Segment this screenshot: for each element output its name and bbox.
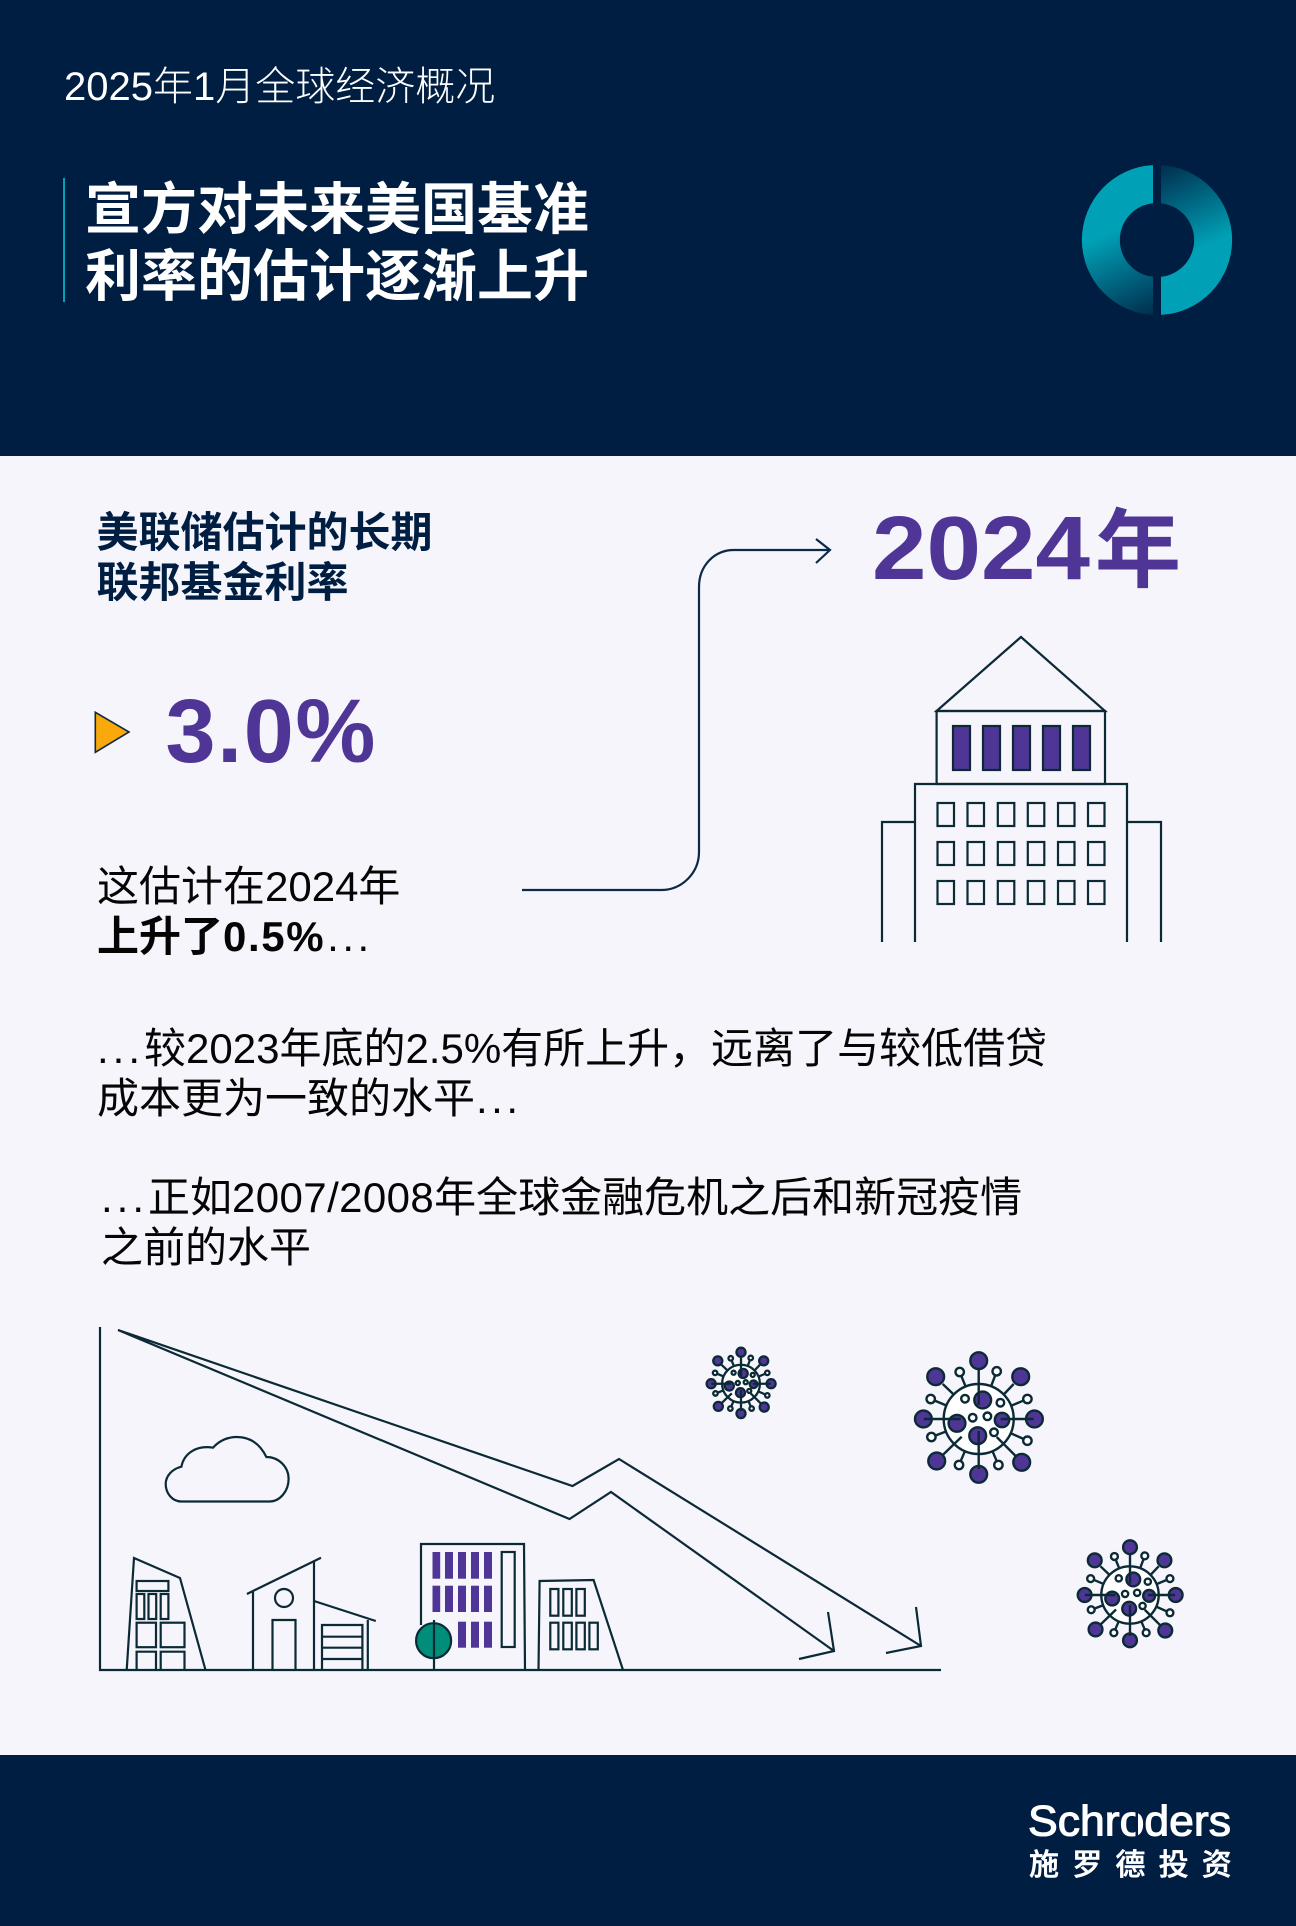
footer panel: [0, 1755, 1296, 1926]
icon: amber triangle marker: [95, 712, 129, 752]
text: estimate rose in 2024: 这估计在2024年: [97, 863, 400, 910]
icon: office block: [421, 1544, 525, 1670]
logo Chinese name: 施罗德投资: [1029, 1849, 1245, 1882]
upper storey: [937, 711, 1105, 784]
big number: 3.0%: 3.0%: [166, 682, 377, 782]
icon: left building: [127, 1558, 206, 1670]
icon: central bank building: [882, 637, 1161, 942]
icon: cloud: [166, 1437, 289, 1502]
text: compared with end 2023: ...较2023年底的2.5%有所上升，远离了与较低借贷: [97, 1025, 1047, 1072]
chart illustration: falling rate over city: [100, 1327, 941, 1670]
text: estimate rose in 2024: [97, 863, 400, 960]
logo: Schroders: [1028, 1798, 1245, 1882]
title: 宣方对未来美国基准: [85, 178, 589, 241]
main block and wings: [882, 784, 1161, 942]
text: as after the GFC and before covid: ...正如2007/2008年全球金融危机之后和新冠疫情: [101, 1174, 1022, 1221]
big label: 2024: 2024: [872, 499, 1090, 599]
title accent bar: [63, 178, 65, 302]
icon: teal ring logo: [1082, 165, 1232, 315]
roof: [937, 637, 1105, 711]
chart axes: [100, 1327, 941, 1670]
section heading: long-term federal funds rate: 联邦基金利率: [96, 559, 349, 606]
icon: medium virus: [1078, 1540, 1183, 1647]
text: as after the GFC and before covid: 之前的水平: [101, 1224, 311, 1271]
windows: [938, 803, 1104, 904]
icon: tree: [416, 1620, 451, 1670]
text: estimate rose in 2024: 上升了0.5%...: [97, 913, 373, 960]
purple columns: [953, 726, 1090, 770]
text: compared with end 2023: [97, 1025, 1047, 1122]
header panel: [0, 0, 1296, 456]
icon: small virus: [707, 1348, 776, 1418]
icon: small office: [538, 1580, 623, 1670]
icon: house with garage: [247, 1558, 376, 1670]
big label: 2024: 年: [1095, 503, 1181, 599]
logo: Schroders: Schroders: [1028, 1798, 1231, 1846]
section heading: long-term federal funds rate: 美联储估计的长期: [96, 509, 433, 556]
title: [85, 178, 589, 308]
arrow: falling trend: [118, 1330, 921, 1659]
arrow: connector to 2024: [522, 539, 830, 890]
text: compared with end 2023: 成本更为一致的水平...: [97, 1075, 522, 1122]
icon: large virus: [915, 1352, 1043, 1483]
header eyebrow text: 2025年1月全球经济概况: [64, 65, 495, 109]
section heading: long-term federal funds rate: [96, 509, 433, 606]
text: as after the GFC and before covid: [101, 1174, 1022, 1271]
title: 利率的估计逐渐上升: [85, 245, 589, 308]
